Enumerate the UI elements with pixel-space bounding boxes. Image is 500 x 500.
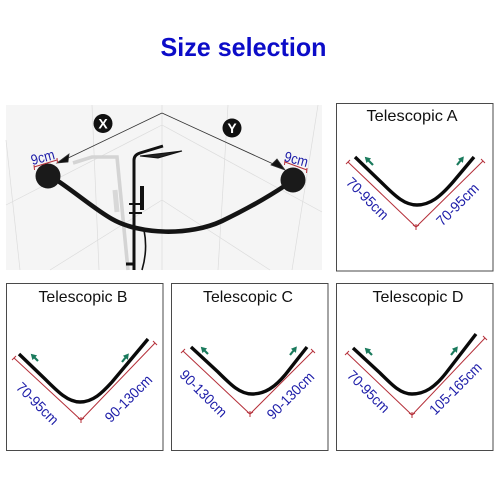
dimension lines D [345,336,487,418]
panel: corner shower photo [6,105,322,270]
dimension lines C [181,349,315,417]
badge X: X [98,116,108,132]
growth arrows D [368,350,455,355]
growth arrows A [368,160,461,165]
panel: Telescopic C: Telescopic C [203,289,293,306]
panel: Telescopic B: Telescopic B [38,289,128,306]
rod A [355,157,474,205]
panel: Telescopic B [6,284,163,450]
panel: Telescopic C [172,284,328,450]
badge Y [222,118,242,138]
left wall mount [36,164,60,188]
panel: Telescopic A: Telescopic A [366,108,458,125]
growth arrows B [34,357,126,362]
label right A: 70-95cm [434,181,483,230]
rod B [19,339,148,402]
9cm right: 9cm [282,149,310,171]
shower shadow [73,157,128,270]
label left C: 90-130cm [176,367,230,421]
label left A: 70-95cm [342,175,391,224]
rod C [191,347,307,394]
label left D: 70-95cm [343,368,392,417]
curved rod [58,181,286,232]
panel: Telescopic D: Telescopic D [372,289,464,306]
dimension lines A [346,159,485,230]
9cm left: 9cm [29,147,57,169]
panel: Telescopic A [336,104,493,271]
label right D: 105-165cm [427,360,486,419]
growth arrows C [204,350,294,355]
label right C: 90-130cm [264,369,318,423]
dimension lines X and Y [57,113,285,170]
label right B: 90-130cm [102,372,156,426]
right wall mount [280,168,306,192]
dimension lines B [12,341,157,423]
label left B: 70-95cm [12,380,61,429]
panel: Telescopic D [336,284,493,450]
shower column [126,146,182,270]
badge Y: Y [227,120,237,136]
badge X [94,114,112,133]
title: Size selection [160,32,326,62]
rod D [353,334,476,394]
